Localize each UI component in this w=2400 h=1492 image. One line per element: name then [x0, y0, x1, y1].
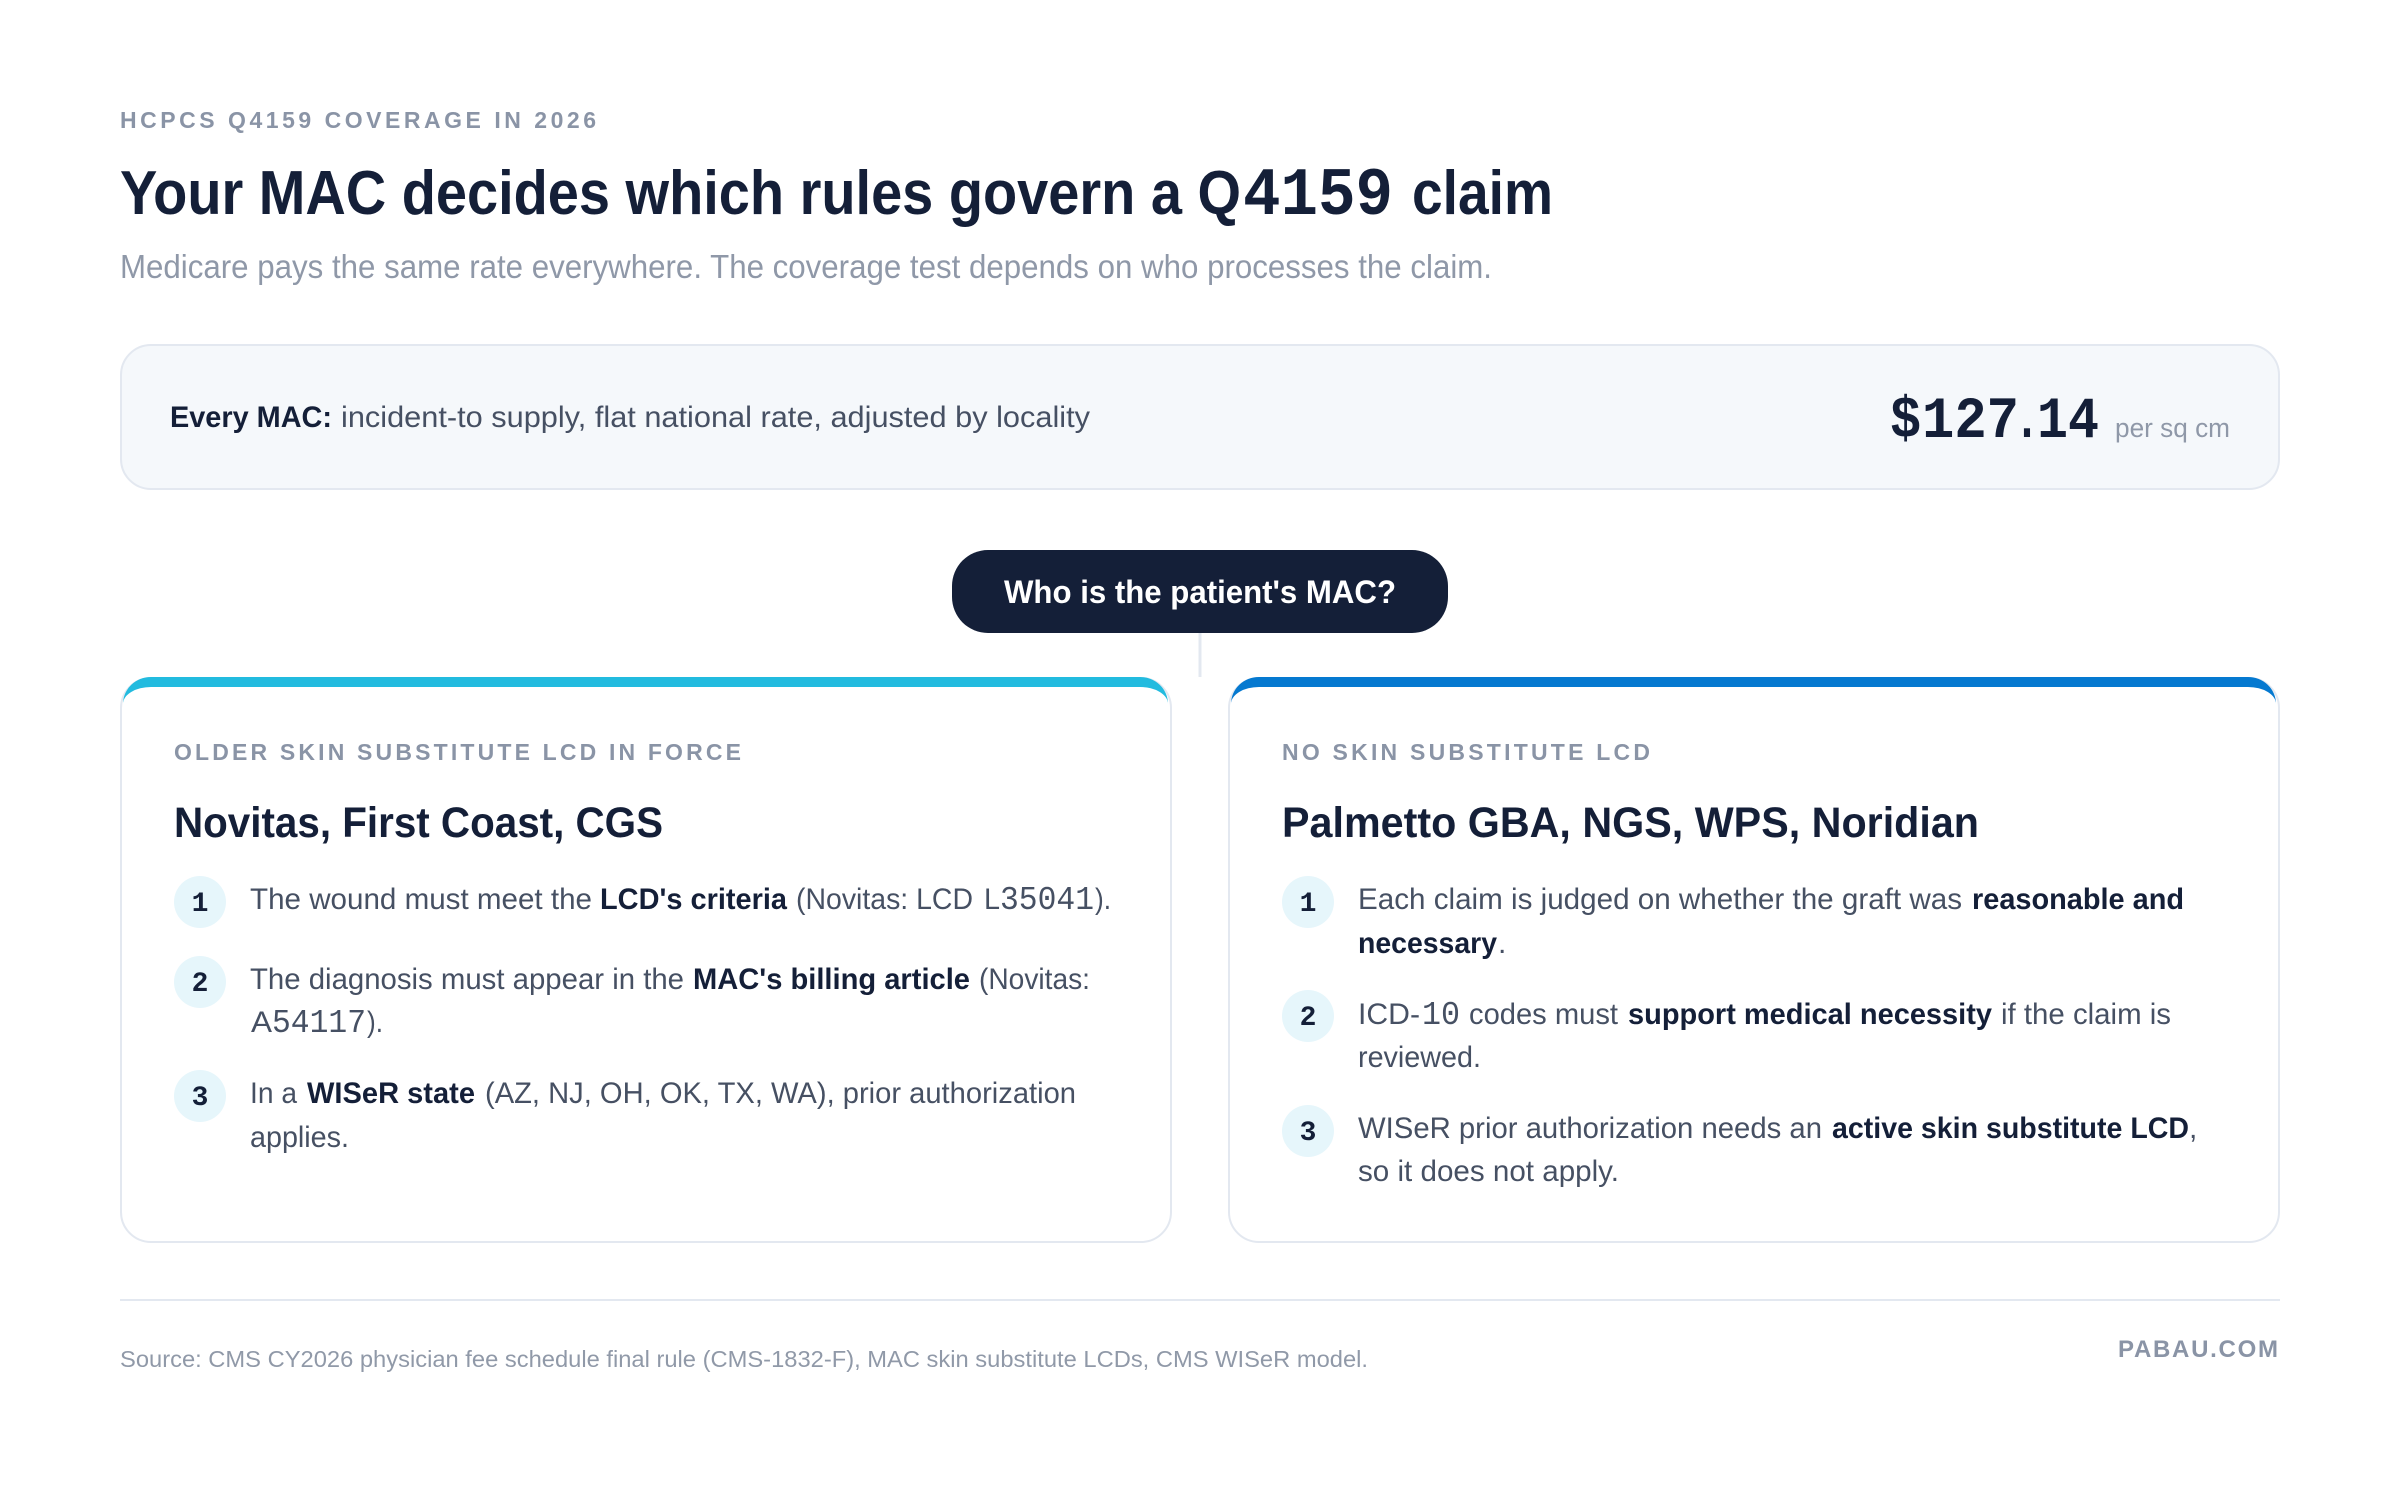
- step 3: [174, 1070, 1076, 1154]
- step 2: A: [251, 1006, 272, 1039]
- step 1: reasonable and: [1972, 883, 2184, 916]
- step 3: (AZ, NJ, OH, OK, TX, WA), prior authorization: [485, 1077, 1076, 1110]
- card label: OLDER SKIN SUBSTITUTE LCD IN FORCE: [174, 739, 741, 765]
- title: claim: [1412, 159, 1553, 228]
- step 1: .: [1498, 927, 1506, 960]
- step 3: 3: [1300, 1118, 1316, 1149]
- step 3: applies.: [250, 1121, 349, 1154]
- step 1: L: [984, 883, 1000, 916]
- price: .: [2021, 385, 2033, 450]
- card label: NO SKIN SUBSTITUTE LCD: [1282, 739, 1650, 765]
- step 3: ,: [2189, 1112, 2197, 1145]
- brand: PABAU.COM: [2118, 1336, 2278, 1363]
- step 1: 35041: [1000, 882, 1094, 919]
- price: [1891, 385, 2230, 455]
- rate band statement: Every MAC:: [170, 401, 332, 434]
- panel: no skin substitute LCD: [1229, 677, 2279, 1242]
- card heading: Novitas, First Coast, CGS: [174, 799, 663, 847]
- step 1: ).: [1095, 883, 1111, 916]
- step 2: 54117: [272, 1005, 366, 1042]
- price: 127: [1922, 390, 2019, 455]
- step 3: WISeR prior authorization needs an: [1358, 1112, 1822, 1145]
- step 1: necessary: [1358, 927, 1497, 960]
- step 3: In a: [250, 1077, 297, 1110]
- step 3: active skin substitute LCD: [1832, 1112, 2189, 1145]
- source note: Source: CMS CY2026 physician fee schedule final rule (CMS-1832-F), MAC skin substitute LCDs, CMS WISeR model.: [120, 1346, 1368, 1372]
- step 2: if the claim is: [2001, 998, 2171, 1031]
- step 1: Each claim is judged on whether the graft was: [1358, 883, 1962, 916]
- step 2: 2: [192, 969, 208, 1000]
- step 2: (Novitas:: [979, 963, 1090, 996]
- card heading: Palmetto GBA, NGS, WPS, Noridian: [1282, 799, 1979, 847]
- step 1: 1: [1300, 889, 1316, 920]
- step 2: 10: [1422, 997, 1460, 1034]
- step 3: 3: [192, 1083, 208, 1114]
- step 1: (Novitas: LCD: [796, 883, 973, 916]
- connector line: [1198, 633, 1202, 677]
- step 2: The diagnosis must appear in the: [250, 963, 684, 996]
- eyebrow: HCPCS Q4159 COVERAGE IN 2026: [120, 107, 596, 133]
- step 2: ).: [367, 1006, 383, 1039]
- step 1: The wound must meet the: [250, 883, 592, 916]
- rate band statement: incident-to supply, flat national rate, adjusted by locality: [341, 401, 1090, 434]
- step 2: reviewed.: [1358, 1041, 1481, 1074]
- step 2: MAC's billing article: [693, 963, 970, 996]
- price: per sq cm: [2115, 413, 2230, 443]
- step 1: LCD's criteria: [600, 883, 787, 916]
- panel: older skin substitute LCD in force: [121, 677, 1171, 1242]
- decision pill: Who is the patient's MAC?: [1004, 574, 1396, 610]
- step 2: ICD-: [1358, 998, 1420, 1031]
- price: 14: [2037, 390, 2099, 455]
- price: $: [1891, 385, 1920, 450]
- step 1: [1282, 876, 2184, 960]
- step 2: support medical necessity: [1628, 998, 1992, 1031]
- title: Your MAC decides which rules govern a Q: [120, 159, 1241, 228]
- title: 4159: [1243, 158, 1393, 235]
- step 2: [1282, 990, 2171, 1074]
- decision pill: [952, 550, 1448, 633]
- step 3: so it does not apply.: [1358, 1155, 1619, 1188]
- step 1: 1: [192, 889, 208, 920]
- step 3: WISeR state: [307, 1077, 475, 1110]
- step 2: codes must: [1469, 998, 1619, 1031]
- step 1: [174, 876, 1111, 928]
- step 3: [1282, 1105, 2197, 1188]
- step 2: [174, 956, 1090, 1042]
- panel: every MAC rate band: [121, 345, 2279, 489]
- step 2: 2: [1300, 1003, 1316, 1034]
- subtitle: Medicare pays the same rate everywhere. The coverage test depends on who processes the claim.: [120, 248, 1492, 285]
